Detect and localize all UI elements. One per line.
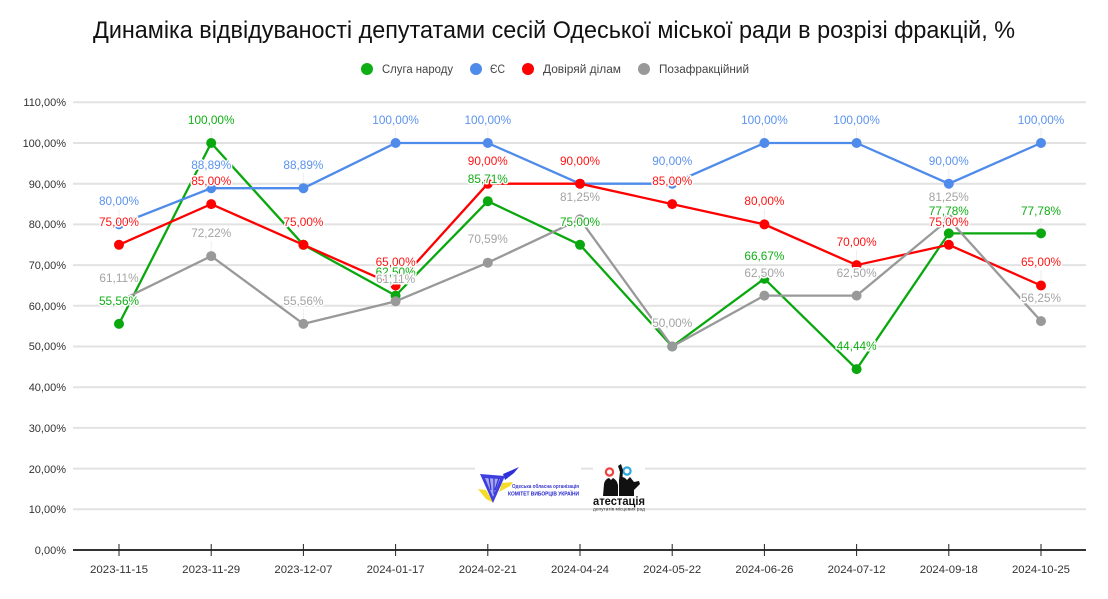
data labels: Довіряй ділам: 90,00% <box>560 154 601 168</box>
logo: Atestatsia: депутатів місцевих рад <box>593 506 645 512</box>
data labels: Слуга народу: 85,71% <box>468 172 508 186</box>
logo: Committee of Voters of Ukraine: КОМІТЕТ ВИБОРЦІВ УКРАЇНИ <box>508 490 579 498</box>
data labels: Позафракційний: 56,25% <box>1021 291 1062 305</box>
series: Слуга народу <box>114 138 1046 374</box>
series: Довіряй ділам <box>114 179 1046 290</box>
y axis labels: 80,00% <box>29 219 66 231</box>
data labels: Довіряй ділам: 75,00% <box>929 215 969 229</box>
x axis: 2023-11-29 <box>182 564 240 576</box>
data labels: Позафракційний: 61,11% <box>99 271 139 285</box>
data labels: Довіряй ділам: 85,00% <box>191 174 232 188</box>
y axis labels: 0,00% <box>35 545 66 557</box>
data labels: Позафракційний <box>99 190 1062 330</box>
data labels: Слуга народу: 77,78% <box>1021 204 1062 218</box>
data labels: Довіряй ділам: 70,00% <box>837 235 877 249</box>
legend: Слуга народу <box>382 64 453 76</box>
series: ЄС <box>114 138 1046 229</box>
data labels: Слуга народу: 75,00% <box>560 215 601 229</box>
data label leader lines <box>119 128 1041 319</box>
logo: Atestatsia <box>593 462 645 512</box>
data label: Позафракційний 2024-01-17: 61,11% <box>376 272 416 286</box>
data labels: Довіряй ділам: 75,00% <box>283 215 324 229</box>
x axis <box>73 544 1086 576</box>
data labels: Слуга народу: 66,67% <box>744 249 785 263</box>
data labels: ЄС: 100,00% <box>1018 113 1065 127</box>
x axis: 2024-05-22 <box>643 564 701 576</box>
y axis labels: 90,00% <box>29 179 66 191</box>
x axis: 2024-01-17 <box>367 564 425 576</box>
data labels: Позафракційний: 72,22% <box>191 226 232 240</box>
y axis labels: 70,00% <box>29 260 66 272</box>
y axis labels <box>23 97 66 557</box>
x axis: 2024-07-12 <box>828 564 886 576</box>
data labels: Слуга народу: 77,78% <box>929 204 969 218</box>
y axis labels: 40,00% <box>29 382 66 394</box>
data labels: Позафракційний: 70,59% <box>468 232 508 246</box>
logo: Committee of Voters of Ukraine: Одеська обласна організація <box>512 483 579 490</box>
logo: Atestatsia: атестація <box>593 496 645 508</box>
y axis labels: 30,00% <box>29 423 66 435</box>
data labels: ЄС: 88,89% <box>191 158 232 172</box>
data labels: ЄС: 100,00% <box>741 113 788 127</box>
data labels: Слуга народу: 55,56% <box>99 294 140 308</box>
legend <box>361 63 749 76</box>
data labels: Позафракційний: 81,25% <box>560 190 601 204</box>
legend: ЄС <box>490 64 505 76</box>
data labels: Довіряй ділам: 75,00% <box>99 215 140 229</box>
x axis: 2024-06-26 <box>735 564 793 576</box>
data labels: Позафракційний: 55,56% <box>283 294 324 308</box>
series: Позафракційний <box>119 214 1046 352</box>
data labels: ЄС: 100,00% <box>465 113 512 127</box>
logo: Committee of Voters of Ukraine <box>475 464 581 505</box>
y axis labels: 50,00% <box>29 341 66 353</box>
data labels: ЄС: 88,89% <box>283 158 324 172</box>
data labels: Довіряй ділам <box>99 154 1062 269</box>
data labels: Слуга народу <box>99 113 1062 353</box>
data labels: Довіряй ділам: 90,00% <box>468 154 508 168</box>
y axis labels: 110,00% <box>23 97 66 109</box>
y axis labels: 20,00% <box>29 464 66 476</box>
y axis labels: 100,00% <box>23 138 66 150</box>
data labels: Слуга народу: 62,50% <box>376 265 416 279</box>
data labels: ЄС: 90,00% <box>652 154 693 168</box>
data labels: Слуга народу: 44,44% <box>837 339 877 353</box>
x axis: 2024-02-21 <box>459 564 517 576</box>
x axis: 2024-09-18 <box>920 564 978 576</box>
data labels: ЄС: 100,00% <box>833 113 880 127</box>
x axis: 2024-04-24 <box>551 564 609 576</box>
legend: Довіряй ділам <box>543 64 621 76</box>
data labels: ЄС: 100,00% <box>372 113 419 127</box>
data labels: Довіряй ділам: 85,00% <box>652 174 693 188</box>
data labels: Позафракційний: 62,50% <box>837 266 877 280</box>
data labels: Слуга народу: 100,00% <box>188 113 235 127</box>
data labels: Позафракційний: 50,00% <box>652 316 693 330</box>
y axis labels: 60,00% <box>29 301 66 313</box>
legend: Позафракційний <box>659 64 749 76</box>
x axis: 2024-10-25 <box>1012 564 1070 576</box>
data labels: ЄС <box>99 113 1065 208</box>
x axis: 2023-11-15 <box>90 564 148 576</box>
data labels: ЄС: 80,00% <box>99 194 140 208</box>
data labels: Позафракційний: 62,50% <box>744 266 785 280</box>
title: Динаміка відвідуваності депутатами сесій Одеської міської ради в розрізі фракцій, % <box>93 17 1015 44</box>
data labels: Довіряй ділам: 65,00% <box>1021 255 1062 269</box>
data labels: ЄС: 90,00% <box>929 154 969 168</box>
data labels: Позафракційний: 81,25% <box>929 190 969 204</box>
y axis labels: 10,00% <box>29 504 66 516</box>
data labels: Довіряй ділам: 65,00% <box>376 255 416 269</box>
data labels: Довіряй ділам: 80,00% <box>744 194 785 208</box>
x axis: 2023-12-07 <box>274 564 332 576</box>
